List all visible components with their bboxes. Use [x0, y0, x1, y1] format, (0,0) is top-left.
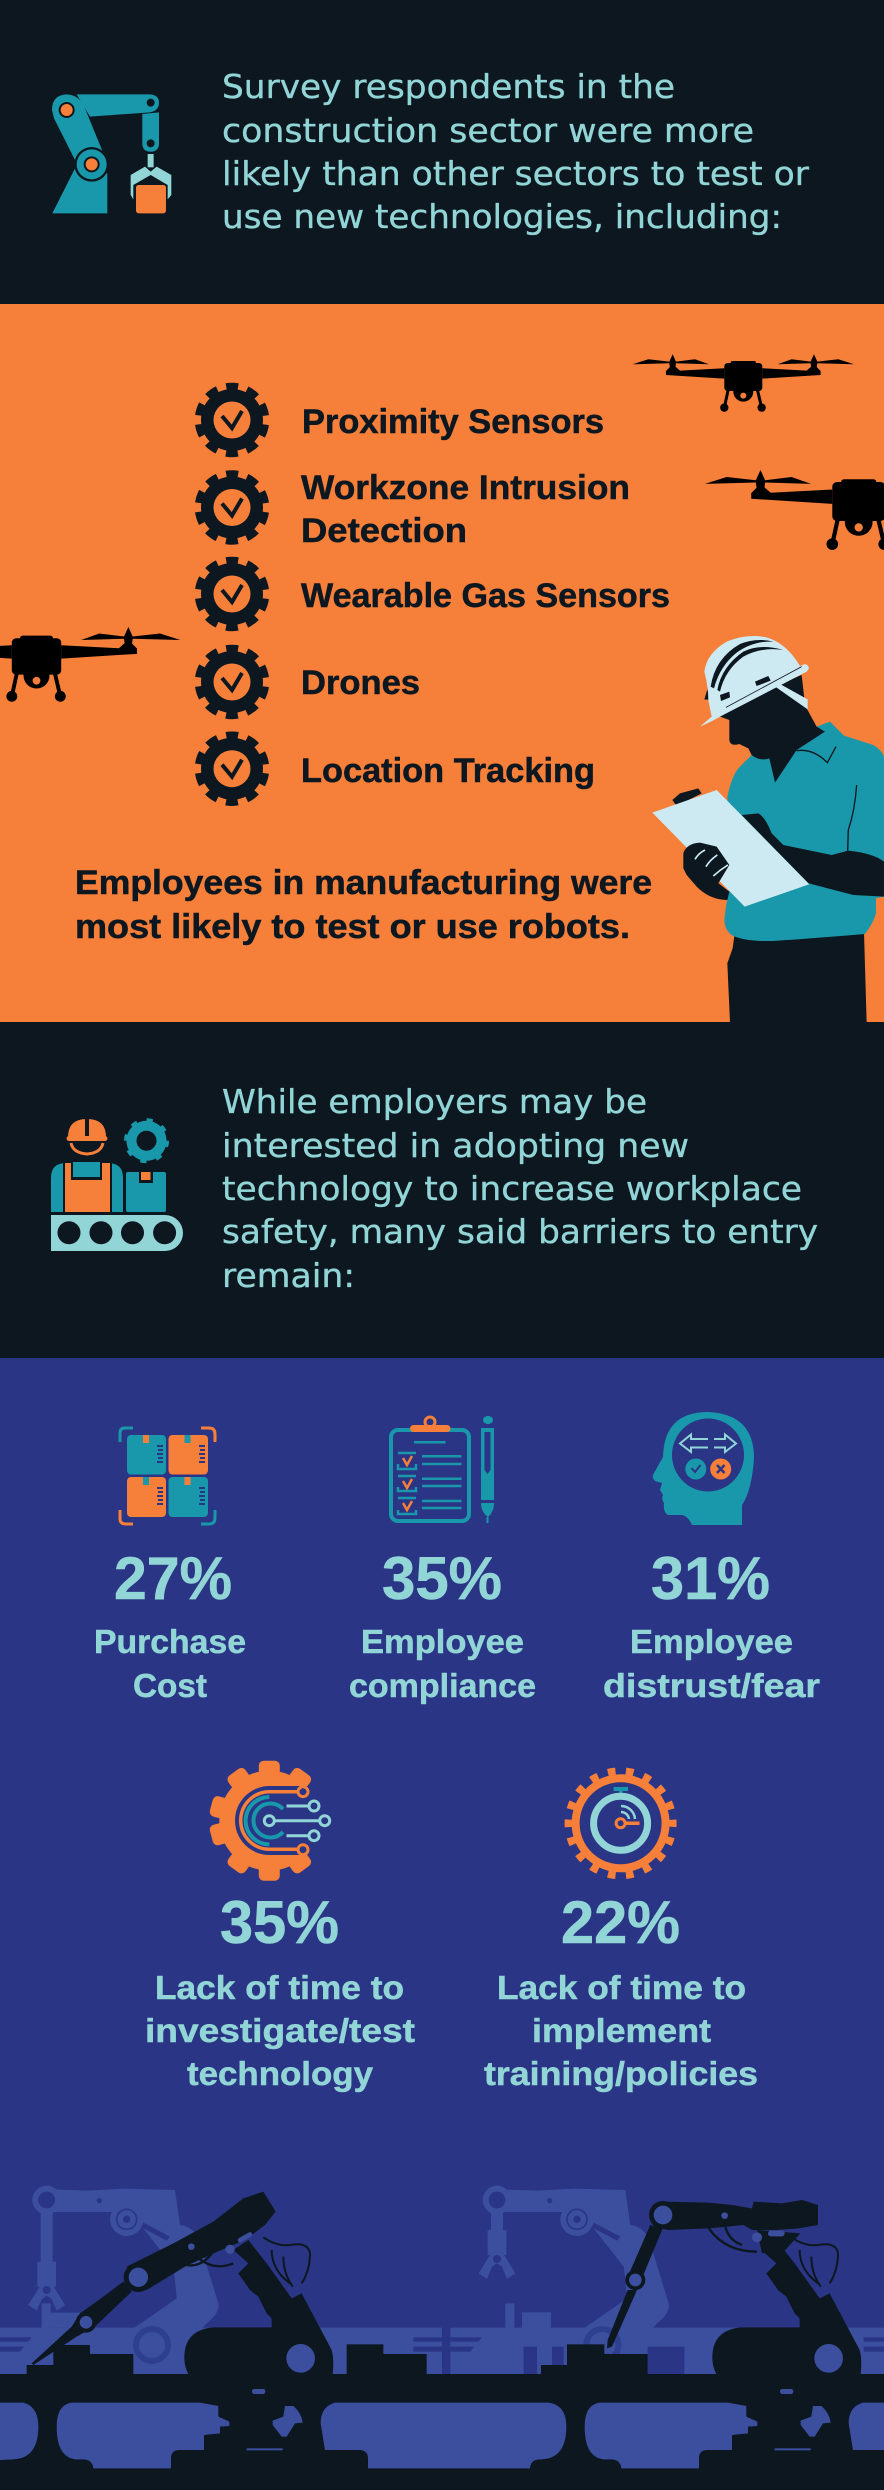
icon: robot arm [52, 94, 171, 213]
text: manufacturing robots: Employees in manufacturing were [75, 864, 652, 902]
icon: gear check 3 [200, 562, 264, 626]
icon: boxes [120, 1428, 215, 1524]
item: location tracking: Location Tracking [301, 752, 595, 790]
stat: 31% employee distrust: 31% [651, 1545, 770, 1612]
stat: 27% purchase cost: 27% [114, 1545, 232, 1612]
intro text: technologies: construction sector were more [222, 111, 754, 150]
item: workzone intrusion detection: Workzone Intrusion [301, 469, 630, 507]
intro text: barriers [222, 1082, 818, 1295]
icon: gear with stopwatch [570, 1772, 672, 1874]
item: drones: Drones [301, 664, 420, 702]
stat: 27% purchase cost: Cost [133, 1667, 207, 1704]
stat: 22% lack of time to implement: Lack of time to [497, 1969, 746, 2006]
stat: 31% employee distrust [603, 1545, 820, 1704]
stat: 22% lack of time to implement: training/policies [484, 2055, 758, 2092]
icon: drone top [633, 354, 854, 412]
stat: 27% purchase cost [94, 1545, 246, 1704]
robot arm right [541, 2200, 861, 2450]
robot arm left [27, 2192, 427, 2450]
stat: 35% lack of time to investigate: Lack of time to [155, 1969, 404, 2006]
panel: barriers [0, 1358, 884, 2490]
icon: clipboard and pen [391, 1416, 494, 1523]
icon: gear check 5 [200, 736, 264, 801]
stat: 31% employee distrust: distrust/fear [603, 1667, 820, 1704]
conveyor bar and pedestals [0, 2374, 884, 2490]
background robot right [450, 2186, 884, 2374]
stat: 35% lack of time to investigate: investigate/test [145, 2012, 415, 2049]
icon: worker at conveyor [51, 1118, 183, 1251]
text: manufacturing robots: most likely to test or use robots. [75, 908, 630, 946]
background robot left [0, 2186, 442, 2374]
stat: 35% employee compliance: compliance [349, 1667, 536, 1704]
stat: 35% employee compliance: Employee [361, 1623, 524, 1660]
icon: head with decision [653, 1412, 754, 1525]
stat: 22% lack of time to implement: 22% [561, 1889, 680, 1956]
item: wearable gas sensors: Wearable Gas Sensors [301, 577, 670, 615]
intro text: barriers: technology to increase workplace [222, 1169, 802, 1208]
icon: gear check 1 [200, 388, 264, 452]
illustration: factory robots footer [0, 2186, 884, 2490]
panel: technologies list [0, 304, 884, 1022]
stat: 35% lack of time to investigate [145, 1889, 415, 2092]
intro text: technologies: likely than other sectors to test or [222, 154, 809, 193]
intro text: technologies: use new technologies, including: [222, 197, 782, 236]
item: workzone intrusion detection: Detection [301, 512, 467, 550]
stat: 35% lack of time to investigate: technology [187, 2055, 374, 2092]
intro text: technologies [222, 67, 809, 236]
icon: gear with circuit [209, 1761, 345, 1881]
stat: 27% purchase cost: Purchase [94, 1623, 246, 1660]
stat: 31% employee distrust: Employee [630, 1623, 793, 1660]
item: workzone intrusion detection [301, 469, 630, 550]
stat: 35% employee compliance [349, 1545, 536, 1704]
intro text: barriers: While employers may be [222, 1082, 647, 1121]
icon: gear check 4 [200, 650, 264, 714]
stat: 22% lack of time to implement: implement [532, 2012, 711, 2049]
text: manufacturing robots [75, 864, 652, 946]
intro text: barriers: safety, many said barriers to entry [222, 1212, 818, 1251]
stat: 22% lack of time to implement [484, 1889, 758, 2092]
stat: 35% employee compliance: 35% [382, 1545, 502, 1612]
icon: drone right [705, 470, 884, 550]
icon: drone left [0, 627, 180, 702]
intro text: technologies: Survey respondents in the [222, 67, 675, 106]
icon: gear check 2 [200, 475, 264, 540]
intro text: barriers: interested in adopting new [222, 1126, 689, 1165]
stat: 35% lack of time to investigate: 35% [220, 1889, 339, 1956]
intro text: barriers: remain: [222, 1256, 355, 1295]
item: proximity sensors: Proximity Sensors [302, 403, 604, 441]
figure: worker with clipboard [652, 636, 884, 1022]
